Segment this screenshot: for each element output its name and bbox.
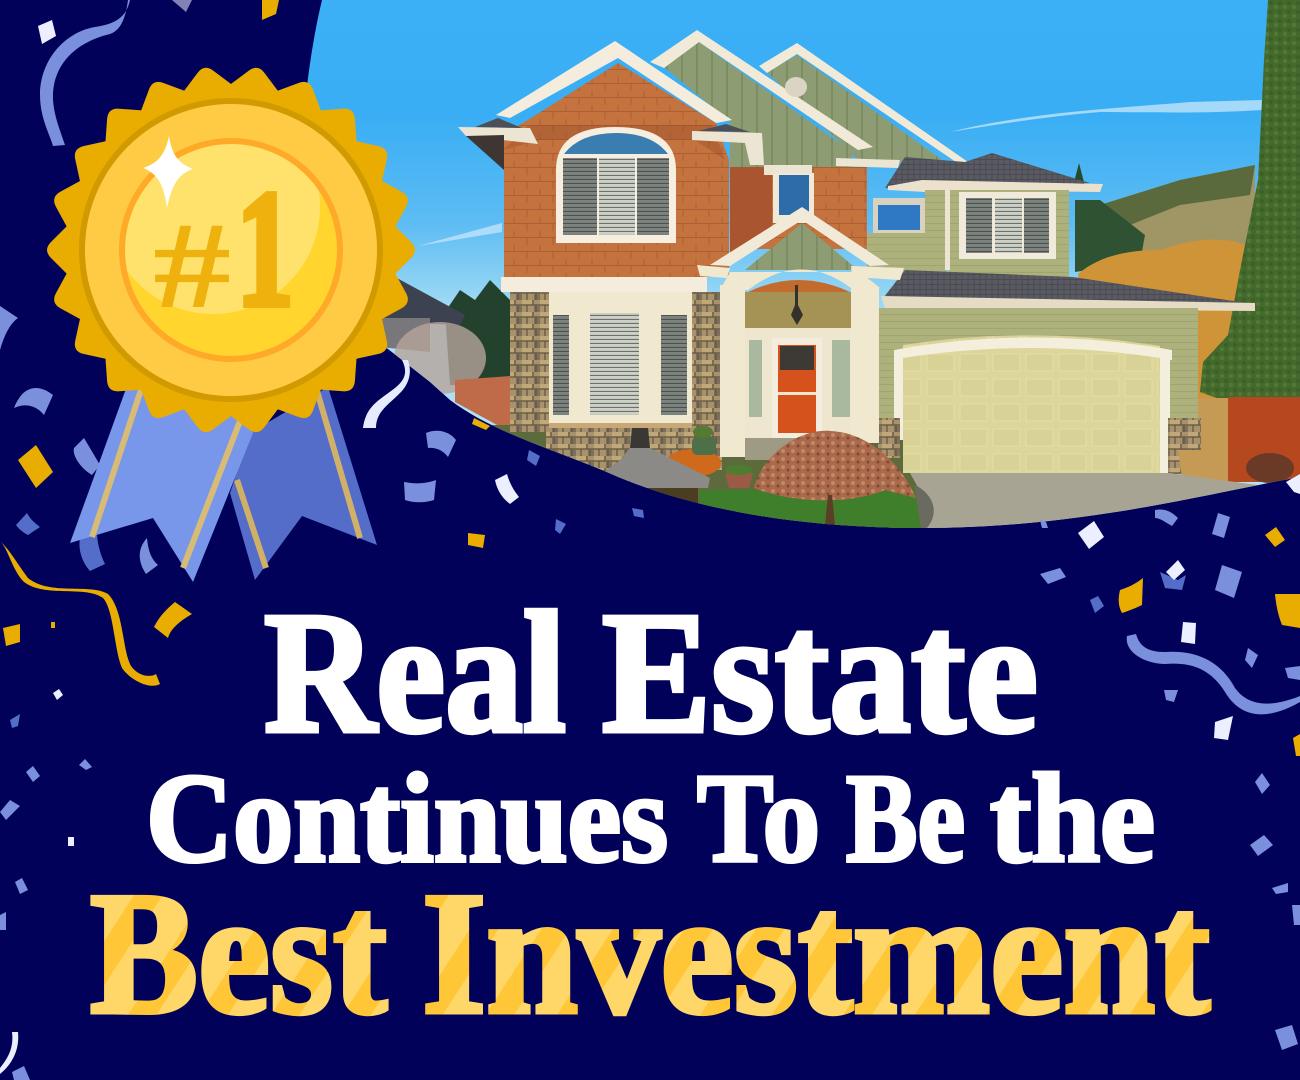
confetti pieces: dark blue bbox=[10, 450, 1186, 728]
medal number: 1 bbox=[236, 156, 294, 342]
ribbon streamer: gold left bbox=[0, 541, 160, 686]
sparkle bbox=[143, 136, 193, 208]
arched window bbox=[556, 127, 676, 243]
wall: upper green gables bbox=[650, 30, 968, 172]
small upper windows bbox=[764, 165, 925, 234]
lawn bbox=[700, 490, 921, 528]
ground floor band bbox=[501, 277, 707, 292]
main gable trim and eaves bbox=[458, 41, 900, 170]
confetti pieces: blue bbox=[0, 306, 1300, 1080]
porch columns bbox=[697, 265, 904, 457]
title line 3: Investment bbox=[422, 856, 1210, 1050]
garage wall bbox=[878, 308, 1198, 420]
award medal with ribbons bbox=[47, 64, 415, 582]
sky bbox=[290, 0, 1300, 530]
medal number: # bbox=[153, 197, 231, 334]
orange bush bbox=[665, 449, 721, 477]
title line 3 bbox=[90, 856, 1210, 1050]
medal number bbox=[153, 156, 294, 342]
planters bbox=[692, 426, 753, 488]
driveway shadow bbox=[915, 485, 934, 530]
ribbon streamer: blue right bbox=[1127, 634, 1300, 714]
title bbox=[90, 576, 1210, 1050]
title line 1: Real bbox=[264, 576, 566, 769]
title line 2 bbox=[146, 749, 1155, 889]
confetti pieces: gold bbox=[3, 0, 1300, 756]
garden ground bbox=[492, 425, 918, 528]
garage door bbox=[894, 335, 1172, 473]
cypress tree bbox=[1200, 0, 1300, 410]
driveway bbox=[910, 473, 1258, 528]
title line 2: Continues bbox=[146, 749, 668, 889]
bay window bbox=[549, 292, 692, 428]
orange shingle walls bbox=[503, 63, 867, 277]
title line 2: Be bbox=[846, 749, 965, 889]
stone walls bbox=[510, 292, 722, 470]
title line 2: To bbox=[697, 749, 820, 889]
porch gable bbox=[710, 207, 889, 270]
lower roof bbox=[881, 270, 1255, 311]
japanese maple bbox=[754, 431, 916, 525]
ribbon: right bbox=[230, 387, 377, 580]
title line 1: Estate bbox=[602, 576, 1038, 769]
neighbouring trees, house and fence bbox=[380, 277, 510, 432]
ribbon: left bbox=[70, 386, 253, 582]
title line 2: the bbox=[990, 749, 1155, 889]
grey upper roofs bbox=[885, 153, 1103, 192]
clouds bbox=[418, 100, 1262, 246]
photo: house against blue sky bbox=[290, 0, 1300, 540]
hillside and autumn bushes bbox=[1072, 163, 1255, 400]
porch and front door bbox=[745, 280, 853, 460]
upper right green wall and window bbox=[867, 190, 1069, 278]
garage stone and pot bbox=[878, 418, 1210, 478]
ribbon streamer: top left bbox=[40, 0, 130, 146]
title line 3: Best bbox=[90, 856, 387, 1050]
garden lantern bbox=[602, 428, 710, 508]
rosette scalloped edge bbox=[47, 64, 415, 436]
medal face bbox=[82, 100, 380, 399]
fence bbox=[1198, 397, 1300, 483]
ribbon streamer: white by house bbox=[363, 360, 410, 428]
title line 1 bbox=[264, 576, 1038, 769]
